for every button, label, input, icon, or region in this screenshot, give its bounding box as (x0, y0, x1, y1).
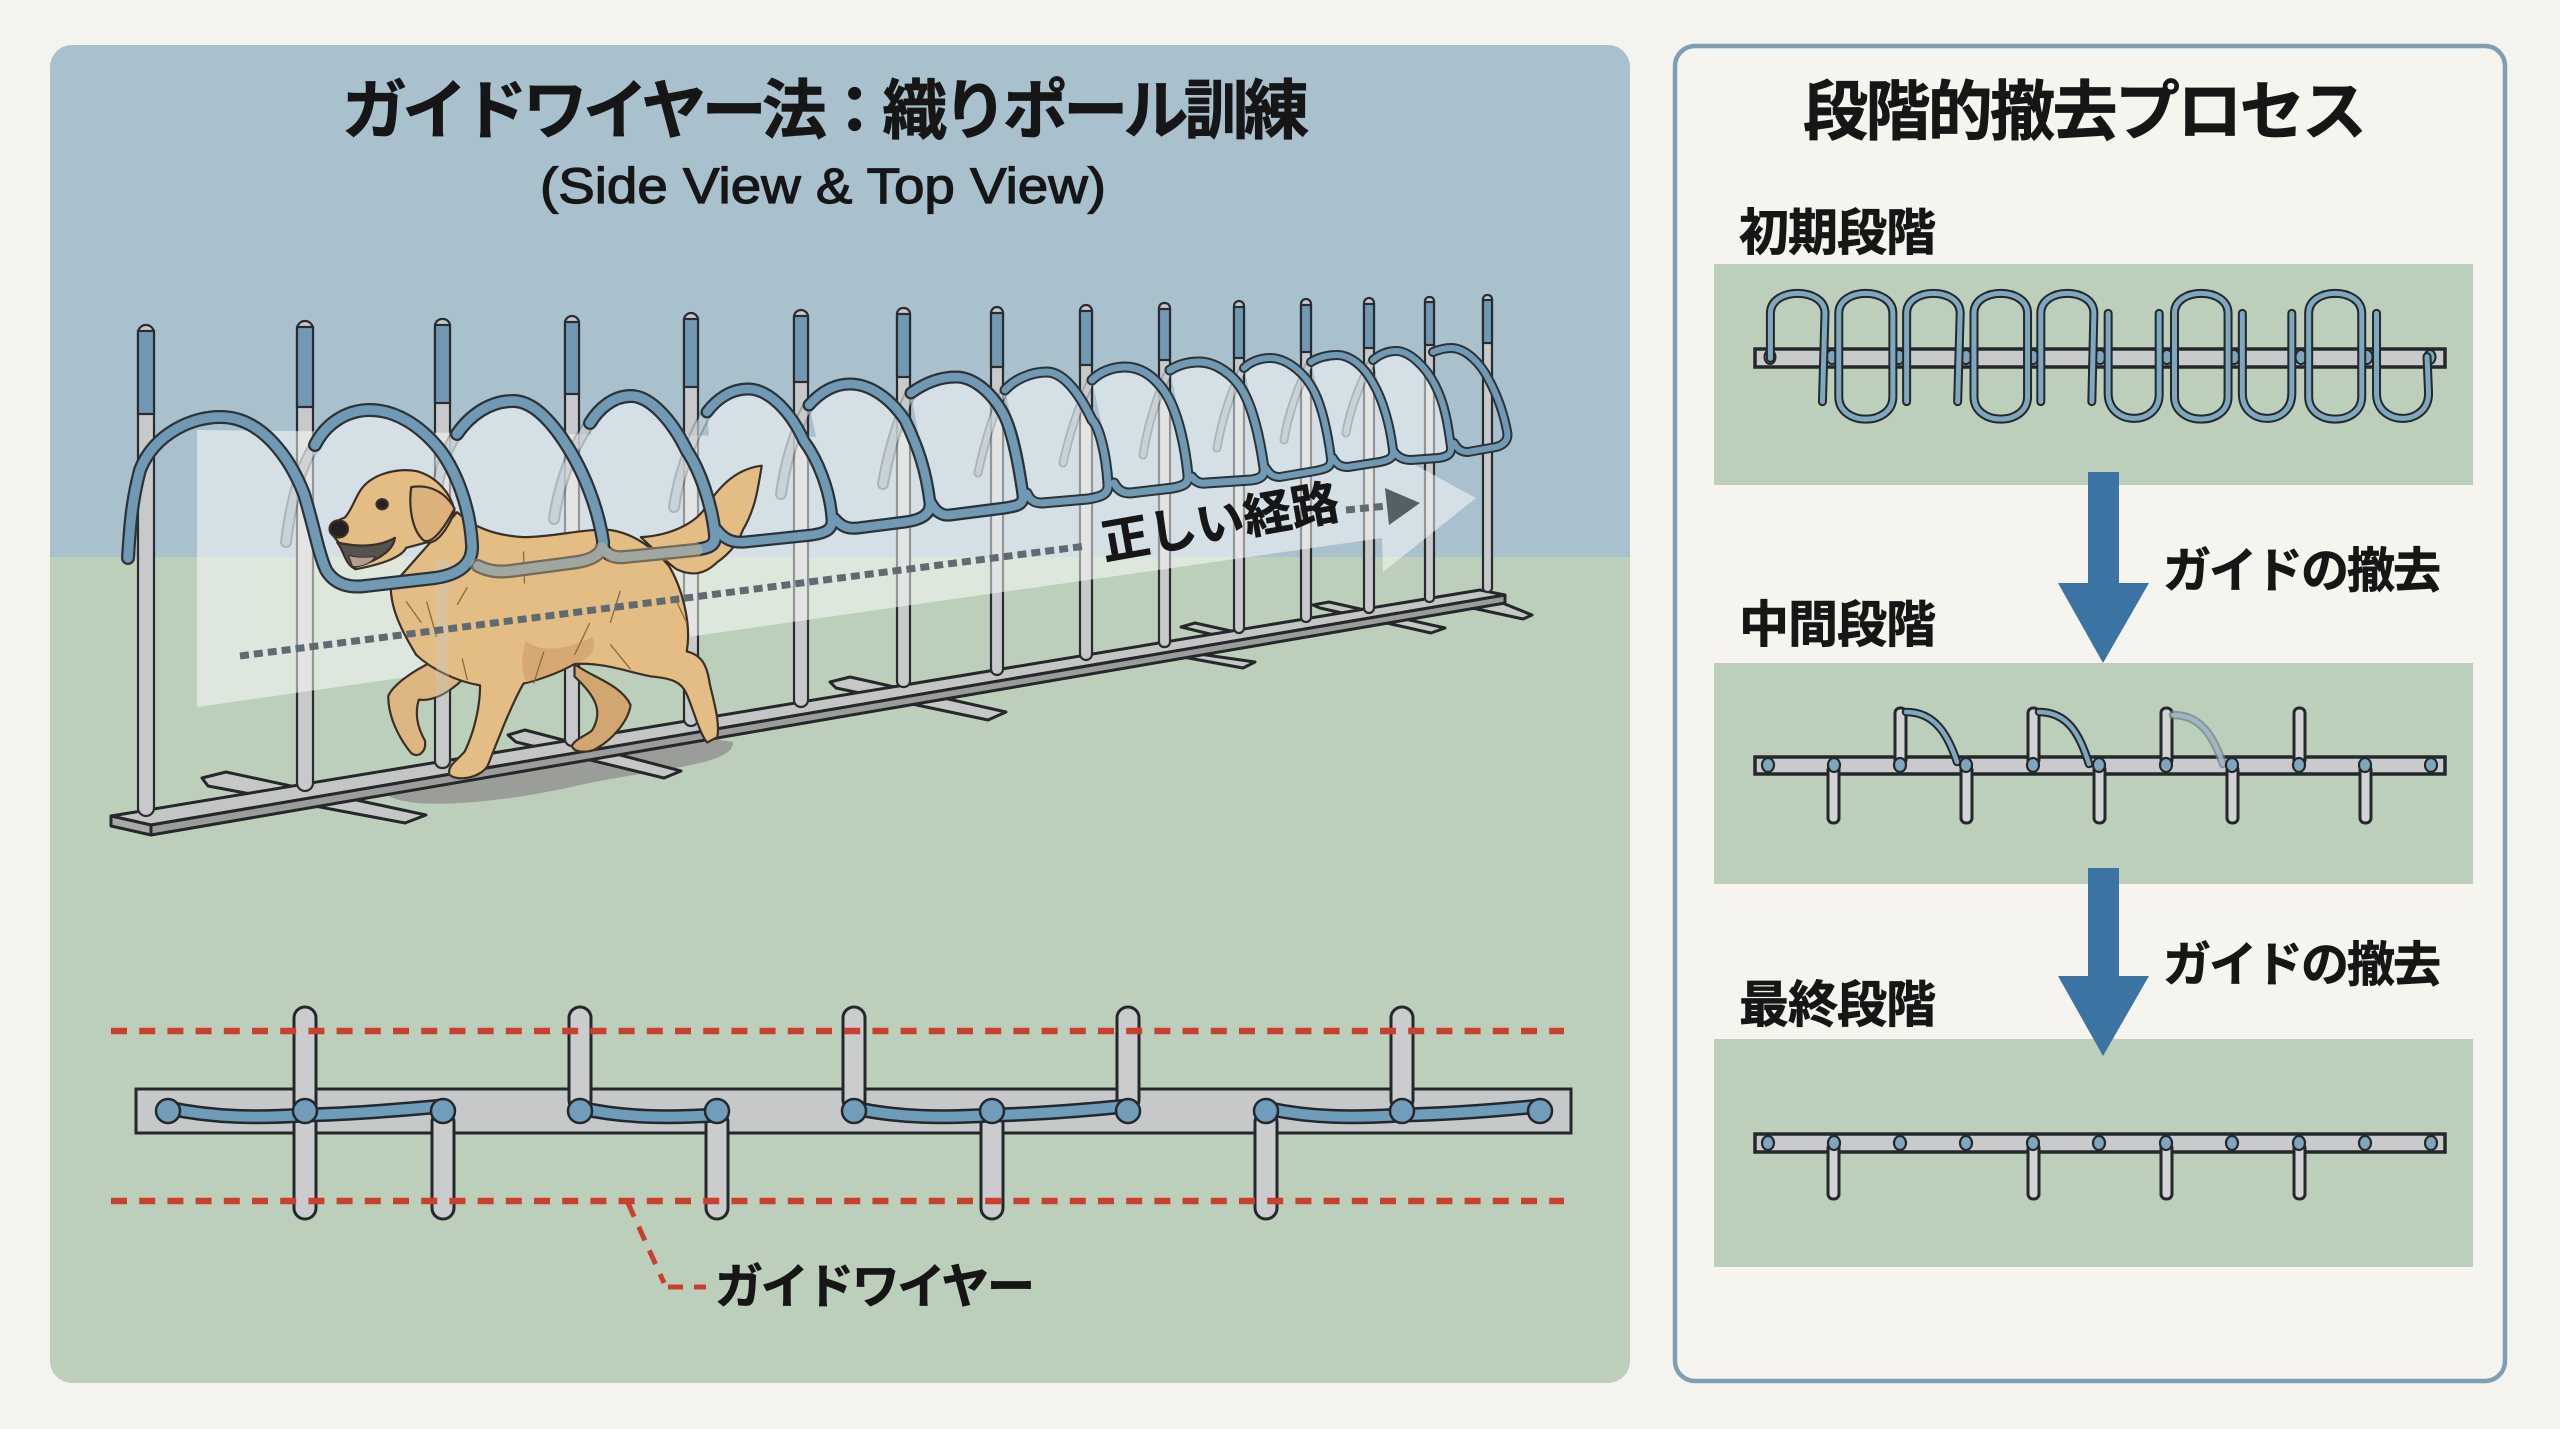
stage 3: final (1714, 977, 2473, 1267)
top view pole nodes (156, 1099, 1552, 1123)
label: correct path: 正しい経路 (1097, 477, 1343, 570)
stage 3 label: 最終段階 (1739, 977, 1936, 1033)
arrow: stage 1 to 2 (2058, 472, 2149, 663)
faint pole seen over dog (436, 560, 449, 700)
panel frame (1675, 46, 2505, 1381)
stage 3 holes (1762, 1136, 2437, 1150)
top view diagram (111, 1007, 1571, 1314)
subheading: views: (Side View & Top View) (540, 158, 1106, 214)
icon: golden retriever dog (330, 466, 762, 778)
arrowhead: small dark triangle (1385, 488, 1420, 525)
stage 1 full wire weave (1770, 293, 2429, 419)
weave pole base rail (111, 590, 1505, 835)
stage 2: middle (1714, 597, 2473, 884)
stage 2 remaining wires (1906, 712, 2223, 764)
correct path translucent arrow and loop fills (197, 351, 1476, 707)
panel background: sky and ground (50, 45, 1630, 1383)
arrow: stage 2 to 3 (2058, 868, 2149, 1056)
top view pole stubs (294, 1007, 1413, 1219)
leader line to label (628, 1203, 706, 1287)
dotted correct path line (240, 506, 1387, 656)
red dashed guide wire boundaries (111, 1031, 1564, 1201)
label: guide removal 1: ガイドの撤去 (2163, 545, 2441, 598)
stage 3 background (1714, 1039, 2473, 1267)
guide wire loops (128, 348, 1507, 587)
stage 1 rail (1755, 349, 2445, 367)
stage 3 rail (1755, 1134, 2445, 1152)
label: guide wire: ガイドワイヤー (715, 1261, 1035, 1314)
stage 1 background (1714, 264, 2473, 485)
stage 2 holes (1762, 758, 2437, 772)
heading: process title: 段階的撤去プロセス (1803, 75, 2367, 148)
weave pole base feet (202, 598, 1532, 823)
side view illustration (111, 295, 1532, 835)
stage 3 poles (1828, 1143, 2305, 1199)
stage 2 background (1714, 663, 2473, 884)
faint back strands of guide wire (286, 360, 1373, 542)
stage 2 rail (1755, 757, 2445, 774)
panel: gradual removal process (1675, 46, 2505, 1381)
label: guide removal 2: ガイドの撤去 (2163, 939, 2441, 992)
stage 1 label: 初期段階 (1739, 205, 1936, 261)
stage 2 poles (1828, 708, 2371, 823)
stage 1 holes (1764, 350, 2436, 364)
panel: guide wire method (50, 45, 1630, 1383)
stage 1: initial (1714, 205, 2473, 485)
stage 2 label: 中間段階 (1739, 597, 1936, 653)
heading: main title: ガイドワイヤー法：織りポール訓練 (342, 74, 1309, 147)
shadow under dog (383, 735, 733, 804)
top view wire segments (168, 1106, 1540, 1117)
weave poles (138, 295, 1492, 816)
top view base rail (136, 1089, 1571, 1133)
